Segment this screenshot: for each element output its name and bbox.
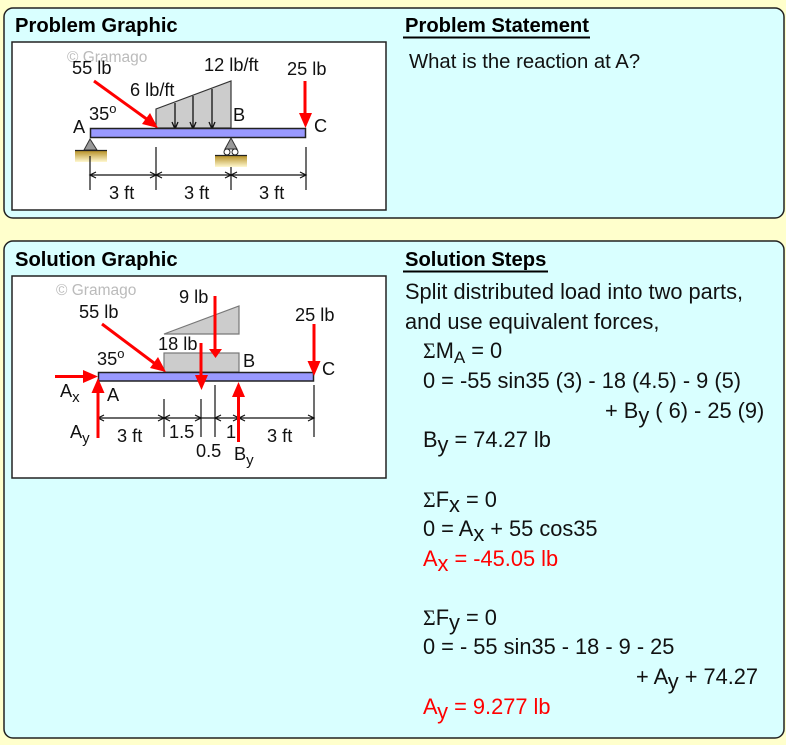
dimension lines xyxy=(90,147,306,190)
text: solution steps: + B xyxy=(605,398,638,423)
solution labels: A xyxy=(107,385,120,405)
problem labels: B xyxy=(233,105,245,125)
solution labels: A xyxy=(60,381,72,401)
problem graphic diagram: © Gramago xyxy=(67,49,147,66)
text: solution steps: ΣM xyxy=(423,338,454,363)
text: solution steps: + 74.27 xyxy=(679,664,758,689)
support A xyxy=(75,139,107,162)
panel: problem xyxy=(4,8,784,218)
text: solution steps: 0 = - 55 sin35 - 18 - 9 - 25 xyxy=(423,634,674,659)
solution labels: 55 lb xyxy=(79,302,118,322)
solution labels: 3 ft xyxy=(267,426,292,446)
problem labels: 3 ft xyxy=(109,183,134,203)
solution labels: B xyxy=(234,444,246,464)
force: 25 lb xyxy=(299,81,312,128)
solution graphic diagram: © Gramago xyxy=(56,282,136,299)
panel: solution xyxy=(4,241,784,738)
text: solution steps: ΣF xyxy=(423,487,449,512)
solution labels: 1.5 xyxy=(169,422,194,442)
text: solution steps: = 9.277 lb xyxy=(448,694,550,719)
text: solution steps: ΣF xyxy=(423,605,449,630)
text: solution steps: A xyxy=(423,546,438,571)
text: solution steps: Split distributed load into two parts, xyxy=(405,279,743,304)
problem labels: C xyxy=(314,116,327,136)
text: solution steps: = 0 xyxy=(460,605,497,630)
beam xyxy=(90,128,306,138)
text: solution steps: + A xyxy=(636,664,668,689)
text: solution steps: y xyxy=(668,669,679,694)
heading: solution steps: Solution Steps xyxy=(405,249,546,271)
text: solution steps: = 0 xyxy=(465,338,502,363)
solution labels: y xyxy=(82,430,90,447)
text: solution steps: = 74.27 lb xyxy=(448,427,551,452)
solution labels: C xyxy=(322,359,335,379)
text: solution steps: + 55 cos35 xyxy=(484,516,598,541)
text: solution steps: A xyxy=(454,348,466,367)
problem labels: 6 lb/ft xyxy=(130,80,174,100)
text: solution steps: y xyxy=(638,403,649,428)
problem labels: 25 lb xyxy=(287,59,326,79)
problem labels: A xyxy=(73,117,86,137)
text: solution steps: and use equivalent forces, xyxy=(405,309,659,334)
text: solution steps xyxy=(405,279,764,724)
problem labels xyxy=(72,55,327,203)
solution labels: 35 xyxy=(97,349,117,369)
equivalent load shapes xyxy=(164,306,239,372)
text: solution steps: x xyxy=(449,492,460,517)
text: solution steps: x xyxy=(438,551,449,576)
solution labels: A xyxy=(70,422,82,442)
dimension lines xyxy=(98,385,314,437)
text: solution steps: = 0 xyxy=(460,487,497,512)
solution labels: 25 lb xyxy=(295,305,334,325)
problem labels: 35 xyxy=(89,104,109,124)
text: solution steps: B xyxy=(423,427,438,452)
solution labels: y xyxy=(246,452,254,469)
distributed load xyxy=(156,81,231,129)
support B xyxy=(215,138,247,167)
text: solution steps: y xyxy=(438,432,449,457)
solution labels: 18 lb xyxy=(158,334,197,354)
problem labels: 55 lb xyxy=(72,58,111,78)
text: solution steps: x xyxy=(473,521,484,546)
text: solution steps: y xyxy=(437,699,448,724)
problem labels: o xyxy=(109,101,116,116)
heading: solution graphic: Solution Graphic xyxy=(15,249,178,271)
text: solution steps: = -45.05 lb xyxy=(448,546,558,571)
solution labels: 1 xyxy=(226,422,236,442)
solution graphic diagram xyxy=(12,276,386,478)
text: solution steps: A xyxy=(423,694,437,719)
solution labels: x xyxy=(72,389,80,406)
solution labels: 0.5 xyxy=(196,441,221,461)
text: solution steps: ( 6) - 25 (9) xyxy=(649,398,764,423)
text: solution steps: 0 = -55 sin35 (3) - 18 (4.5) - 9 (5) xyxy=(423,368,741,393)
text: solution steps: 0 = A xyxy=(423,516,473,541)
problem graphic diagram xyxy=(12,42,386,210)
solution labels: o xyxy=(117,346,124,361)
problem labels: 3 ft xyxy=(184,183,209,203)
heading: problem graphic: Problem Graphic xyxy=(15,15,178,37)
text: problem statement: What is the reaction at A? xyxy=(409,51,640,73)
solution labels: 3 ft xyxy=(117,426,142,446)
red force arrows xyxy=(55,296,320,442)
solution labels: B xyxy=(243,351,255,371)
heading: problem statement: Problem Statement xyxy=(405,15,589,37)
problem labels: 12 lb/ft xyxy=(204,55,259,75)
text: solution steps: y xyxy=(449,610,460,635)
force: 55 lb xyxy=(94,81,158,128)
solution labels: 9 lb xyxy=(179,287,208,307)
beam xyxy=(98,372,314,381)
solution labels xyxy=(60,287,335,469)
problem labels: 3 ft xyxy=(259,183,284,203)
